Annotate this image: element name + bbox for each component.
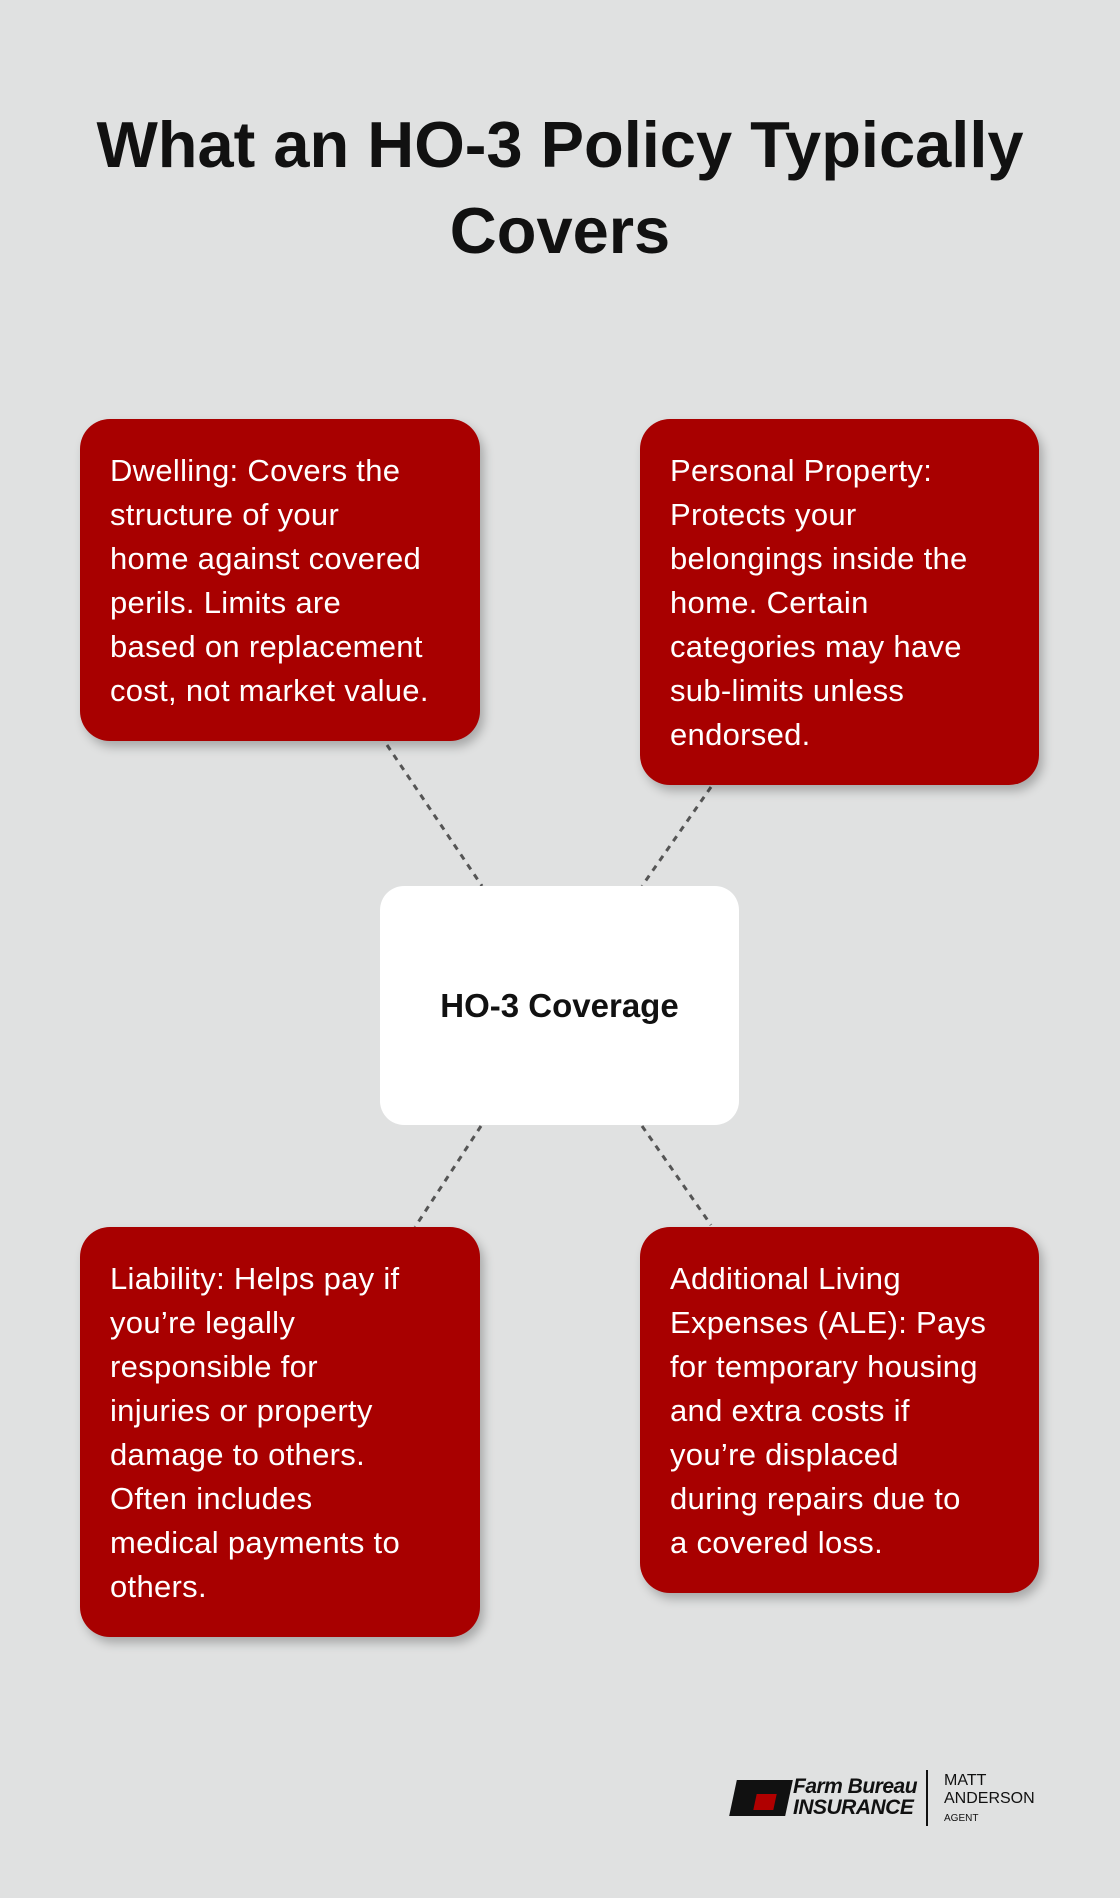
panel: personal property: endorsed.: [670, 717, 811, 752]
panel: dwelling: cost, not market value.: [110, 673, 429, 708]
panel: ALE: Additional Living: [670, 1261, 901, 1296]
panel: dwelling: perils. Limits are: [110, 585, 341, 620]
panel: ALE: for temporary housing: [670, 1349, 978, 1384]
panel: dwelling: structure of your: [110, 497, 339, 532]
panel: dwelling: home against covered: [110, 541, 421, 576]
logo: Farm Bureau: [793, 1775, 917, 1798]
panel: ALE: and extra costs if: [670, 1393, 910, 1428]
panel: dwelling: based on replacement: [110, 629, 423, 664]
panel: liability: others.: [110, 1569, 207, 1604]
panel: liability: [80, 1227, 480, 1637]
panel: liability: you’re legally: [110, 1305, 295, 1340]
panel: ALE: [640, 1227, 1039, 1593]
center node: HO-3 Coverage: [440, 986, 679, 1024]
center node: [380, 886, 739, 1125]
panel: liability: responsible for: [110, 1349, 318, 1384]
panel: dwelling: [80, 419, 480, 741]
panel: ALE: during repairs due to: [670, 1481, 961, 1516]
panel: dwelling: Dwelling: Covers the: [110, 453, 400, 488]
panel: liability: injuries or property: [110, 1393, 373, 1428]
logo: AGENT: [944, 1813, 978, 1824]
logo: INSURANCE: [793, 1796, 913, 1819]
panel: liability: Often includes: [110, 1481, 312, 1516]
title: [96, 108, 1024, 267]
logo: [729, 1770, 1035, 1826]
panel: personal property: [640, 419, 1039, 785]
panel: ALE: Expenses (ALE): Pays: [670, 1305, 986, 1340]
panel: personal property: Protects your: [670, 497, 857, 532]
panel: liability: medical payments to: [110, 1525, 400, 1560]
panel: personal property: sub-limits unless: [670, 673, 904, 708]
panel: personal property: belongings inside the: [670, 541, 968, 576]
logo: ANDERSON: [944, 1790, 1035, 1807]
panel: ALE: you’re displaced: [670, 1437, 899, 1472]
logo: MATT: [944, 1772, 986, 1789]
title: What an HO-3 Policy Typically: [96, 108, 1024, 181]
panel: ALE: a covered loss.: [670, 1525, 883, 1560]
panel: personal property: Personal Property:: [670, 453, 932, 488]
panel: personal property: home. Certain: [670, 585, 869, 620]
panel: personal property: categories may have: [670, 629, 962, 664]
panel: liability: Liability: Helps pay if: [110, 1261, 399, 1296]
panel: liability: damage to others.: [110, 1437, 365, 1472]
title: Covers: [450, 194, 670, 267]
